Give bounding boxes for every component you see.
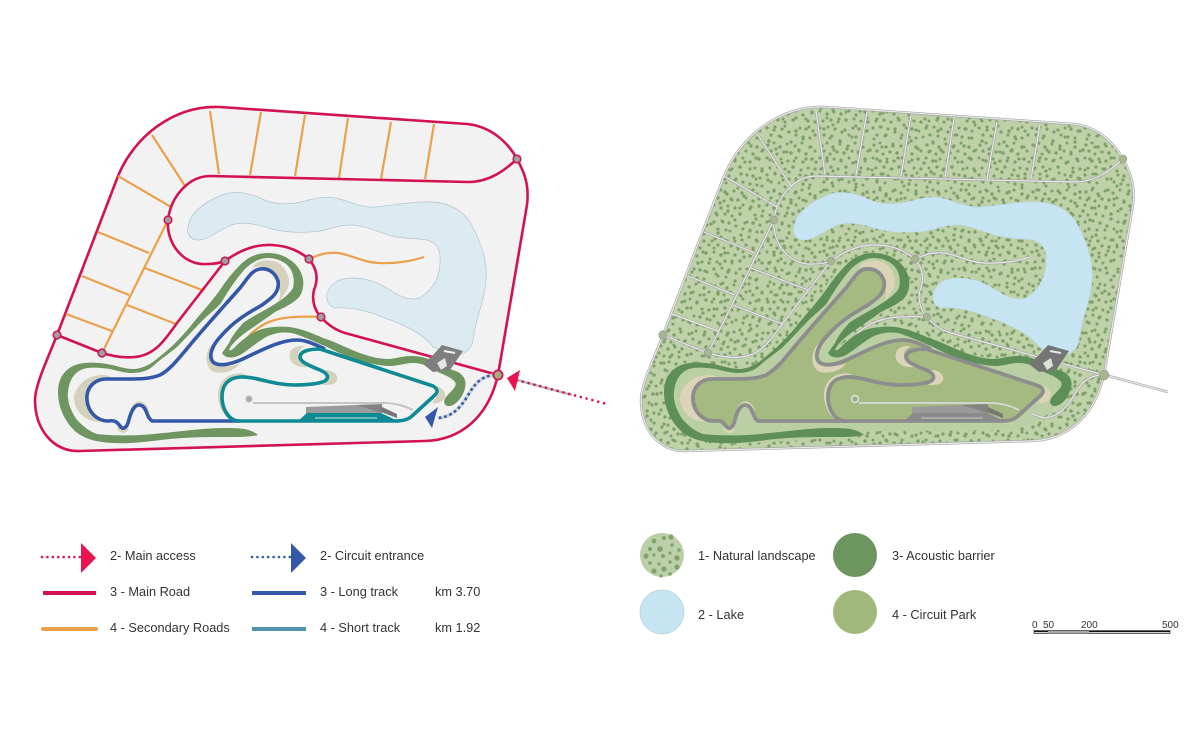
legend item: natural landscape: 1- Natural landscape xyxy=(698,548,816,563)
legend item: long track: 3 - Long track xyxy=(320,584,399,599)
main road inner branch xyxy=(168,159,517,375)
legend item: main access: 2- Main access xyxy=(110,548,196,563)
scale bar xyxy=(1032,620,1179,634)
legend item: long track: km 3.70 xyxy=(435,584,480,599)
scale bar: 200 xyxy=(1081,620,1098,631)
start circle xyxy=(852,396,858,402)
run-off patches xyxy=(74,260,445,433)
road casing xyxy=(641,107,1168,451)
legend item: short track: 4 - Short track xyxy=(320,620,401,635)
legend item: lake: 2 - Lake xyxy=(698,607,744,622)
main access arrow xyxy=(507,370,520,391)
circuit park xyxy=(693,269,1043,428)
tree dots layer one xyxy=(641,107,1134,451)
legend item: circuit park xyxy=(833,590,977,634)
legend item: long track xyxy=(252,584,480,599)
legend item: circuit entrance: 2- Circuit entrance xyxy=(320,548,424,563)
pit lane band xyxy=(298,413,398,421)
road surface xyxy=(641,107,1168,451)
legend item: natural landscape xyxy=(640,533,816,578)
main access dotted route xyxy=(517,380,607,404)
legend item: short track xyxy=(252,620,480,635)
legend item: main road xyxy=(43,584,190,599)
legend item: circuit entrance xyxy=(252,543,424,573)
start circle xyxy=(246,396,252,402)
long track xyxy=(693,269,931,428)
scale bar: 0 xyxy=(1032,620,1038,631)
legend item: acoustic barrier xyxy=(833,533,996,577)
lake xyxy=(793,192,1092,355)
entry gate xyxy=(1029,345,1069,372)
tree dots layer two xyxy=(641,107,1134,451)
legend item: secondary roads xyxy=(41,620,230,635)
legend item: secondary roads: 4 - Secondary Roads xyxy=(110,620,230,635)
pit lane line xyxy=(315,417,377,419)
right map: landscape plan xyxy=(641,107,1168,451)
pit building xyxy=(904,404,1004,421)
long track xyxy=(87,269,325,428)
natural landscape base xyxy=(641,107,1134,451)
run-off patches xyxy=(680,260,1051,433)
circuit entrance arrow xyxy=(425,407,438,428)
left map: circulation plan xyxy=(35,107,607,451)
entry gate xyxy=(423,345,463,372)
short track xyxy=(828,349,1043,421)
legend item: lake xyxy=(640,590,744,634)
acoustic barrier xyxy=(58,253,466,443)
circuit entrance dotted route xyxy=(438,375,495,418)
legend: circulation xyxy=(41,543,480,635)
legend item: acoustic barrier: 3- Acoustic barrier xyxy=(892,548,996,563)
road junction nodes xyxy=(659,155,1127,380)
scale bar: 50 xyxy=(1043,620,1055,631)
secondary roads xyxy=(66,111,434,353)
pit lane line xyxy=(921,417,983,419)
pit building xyxy=(306,404,397,418)
site boundary main road loop xyxy=(35,107,528,451)
legend: landscape xyxy=(640,533,996,634)
pit roof line xyxy=(253,403,413,410)
legend item: main access xyxy=(42,543,196,573)
legend item: main road: 3 - Main Road xyxy=(110,584,190,599)
acoustic barrier xyxy=(664,253,1072,443)
pit roof line xyxy=(859,403,1019,410)
legend item: short track: km 1.92 xyxy=(435,620,480,635)
circuit buffer area xyxy=(664,253,1073,443)
main gate node xyxy=(493,370,503,380)
lake outline xyxy=(187,192,486,355)
scale bar: 500 xyxy=(1162,620,1179,631)
main road lower branch xyxy=(57,261,225,357)
road junction nodes xyxy=(53,155,521,357)
short track xyxy=(222,349,437,421)
legend item: circuit park: 4 - Circuit Park xyxy=(892,607,977,622)
